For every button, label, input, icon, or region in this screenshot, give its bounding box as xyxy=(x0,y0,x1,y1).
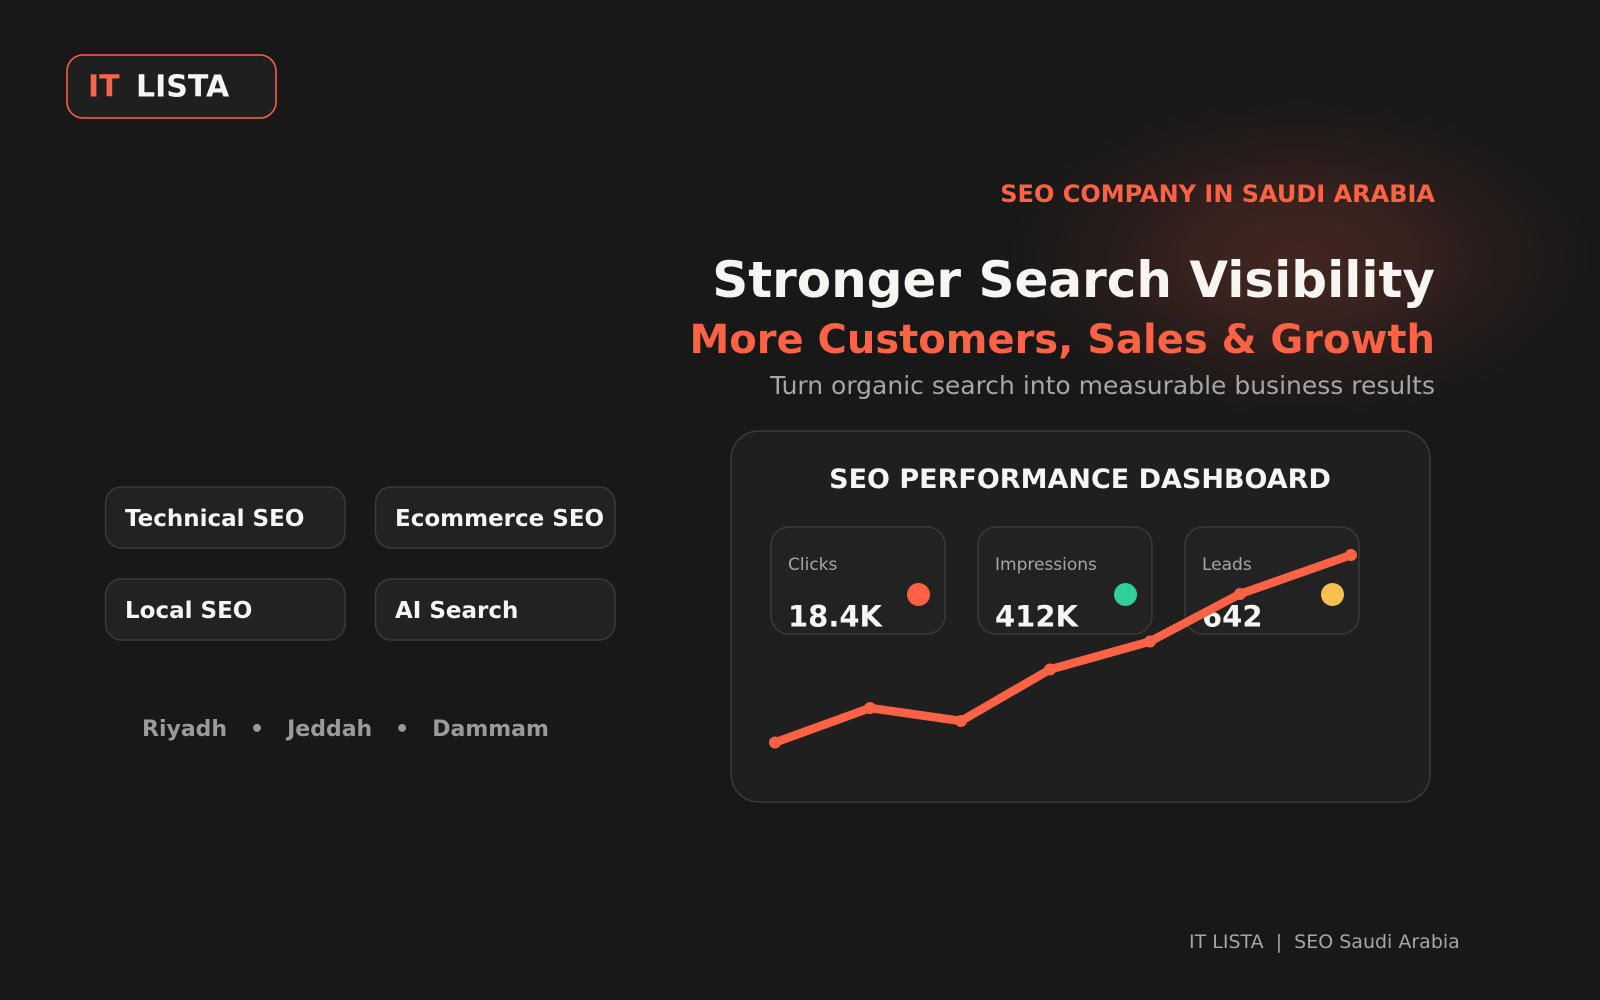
metric card: Leads xyxy=(1185,527,1359,634)
dashboard heading: SEO PERFORMANCE DASHBOARD xyxy=(829,464,1331,495)
metric card: Leads: 642 xyxy=(1202,600,1263,634)
metric card: Impressions: 412K xyxy=(995,600,1080,634)
logo badge: IT xyxy=(88,70,120,104)
service chip: AI Search xyxy=(376,579,615,640)
metric card: Clicks: Clicks xyxy=(788,555,838,575)
service chip: Ecommerce SEO: Ecommerce SEO xyxy=(395,506,604,532)
metric card: Impressions: Impressions xyxy=(995,555,1097,575)
panel: SEO performance dashboard xyxy=(731,431,1430,802)
title: Stronger Search Visibility xyxy=(712,251,1435,309)
cities: Riyadh • Jeddah • Dammam xyxy=(142,717,549,742)
eyebrow: SEO COMPANY IN SAUDI ARABIA xyxy=(1000,180,1435,208)
logo badge: LISTA xyxy=(136,70,230,104)
service chip: AI Search: AI Search xyxy=(395,598,518,624)
logo badge xyxy=(67,55,276,118)
service chip: Ecommerce SEO xyxy=(376,487,615,548)
service chip: Local SEO xyxy=(106,579,345,640)
metric card: Impressions xyxy=(978,527,1152,634)
service chip: Technical SEO xyxy=(106,487,345,548)
metric card: Clicks: 18.4K xyxy=(788,600,884,634)
tagline: Turn organic search into measurable business results xyxy=(769,371,1435,400)
background glow xyxy=(1000,93,1600,423)
service chip: Technical SEO: Technical SEO xyxy=(125,506,304,532)
subtitle: More Customers, Sales & Growth xyxy=(689,317,1435,363)
line chart xyxy=(769,549,1357,748)
footer: IT LISTA | SEO Saudi Arabia xyxy=(1189,931,1460,953)
metric card: Clicks xyxy=(771,527,945,634)
metric card: Leads: Leads xyxy=(1202,555,1252,575)
service chip: Local SEO: Local SEO xyxy=(125,598,252,624)
